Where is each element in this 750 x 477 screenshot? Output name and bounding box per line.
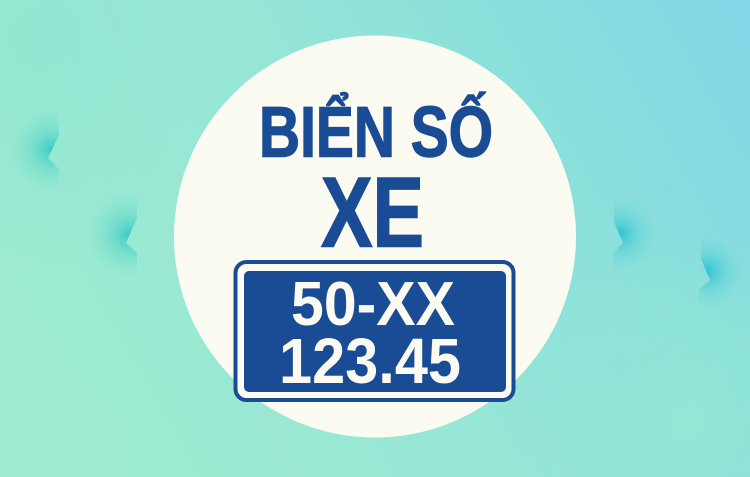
licence plate [236,262,514,400]
title: BIỂN SỐ: BIỂN SỐ [259,92,493,172]
title: XE: XE [321,156,424,268]
cream circle [174,36,576,438]
decorative crease: far right [699,230,750,312]
plate outer border [236,262,514,400]
decorative crease: lower left [80,190,137,282]
decorative crease: upper left [5,105,59,195]
plate line 1: 50-XX [291,270,455,339]
plate inner panel [244,271,506,392]
decorative crease: middle right [613,192,666,276]
plate line 2: 123.45 [279,325,461,397]
